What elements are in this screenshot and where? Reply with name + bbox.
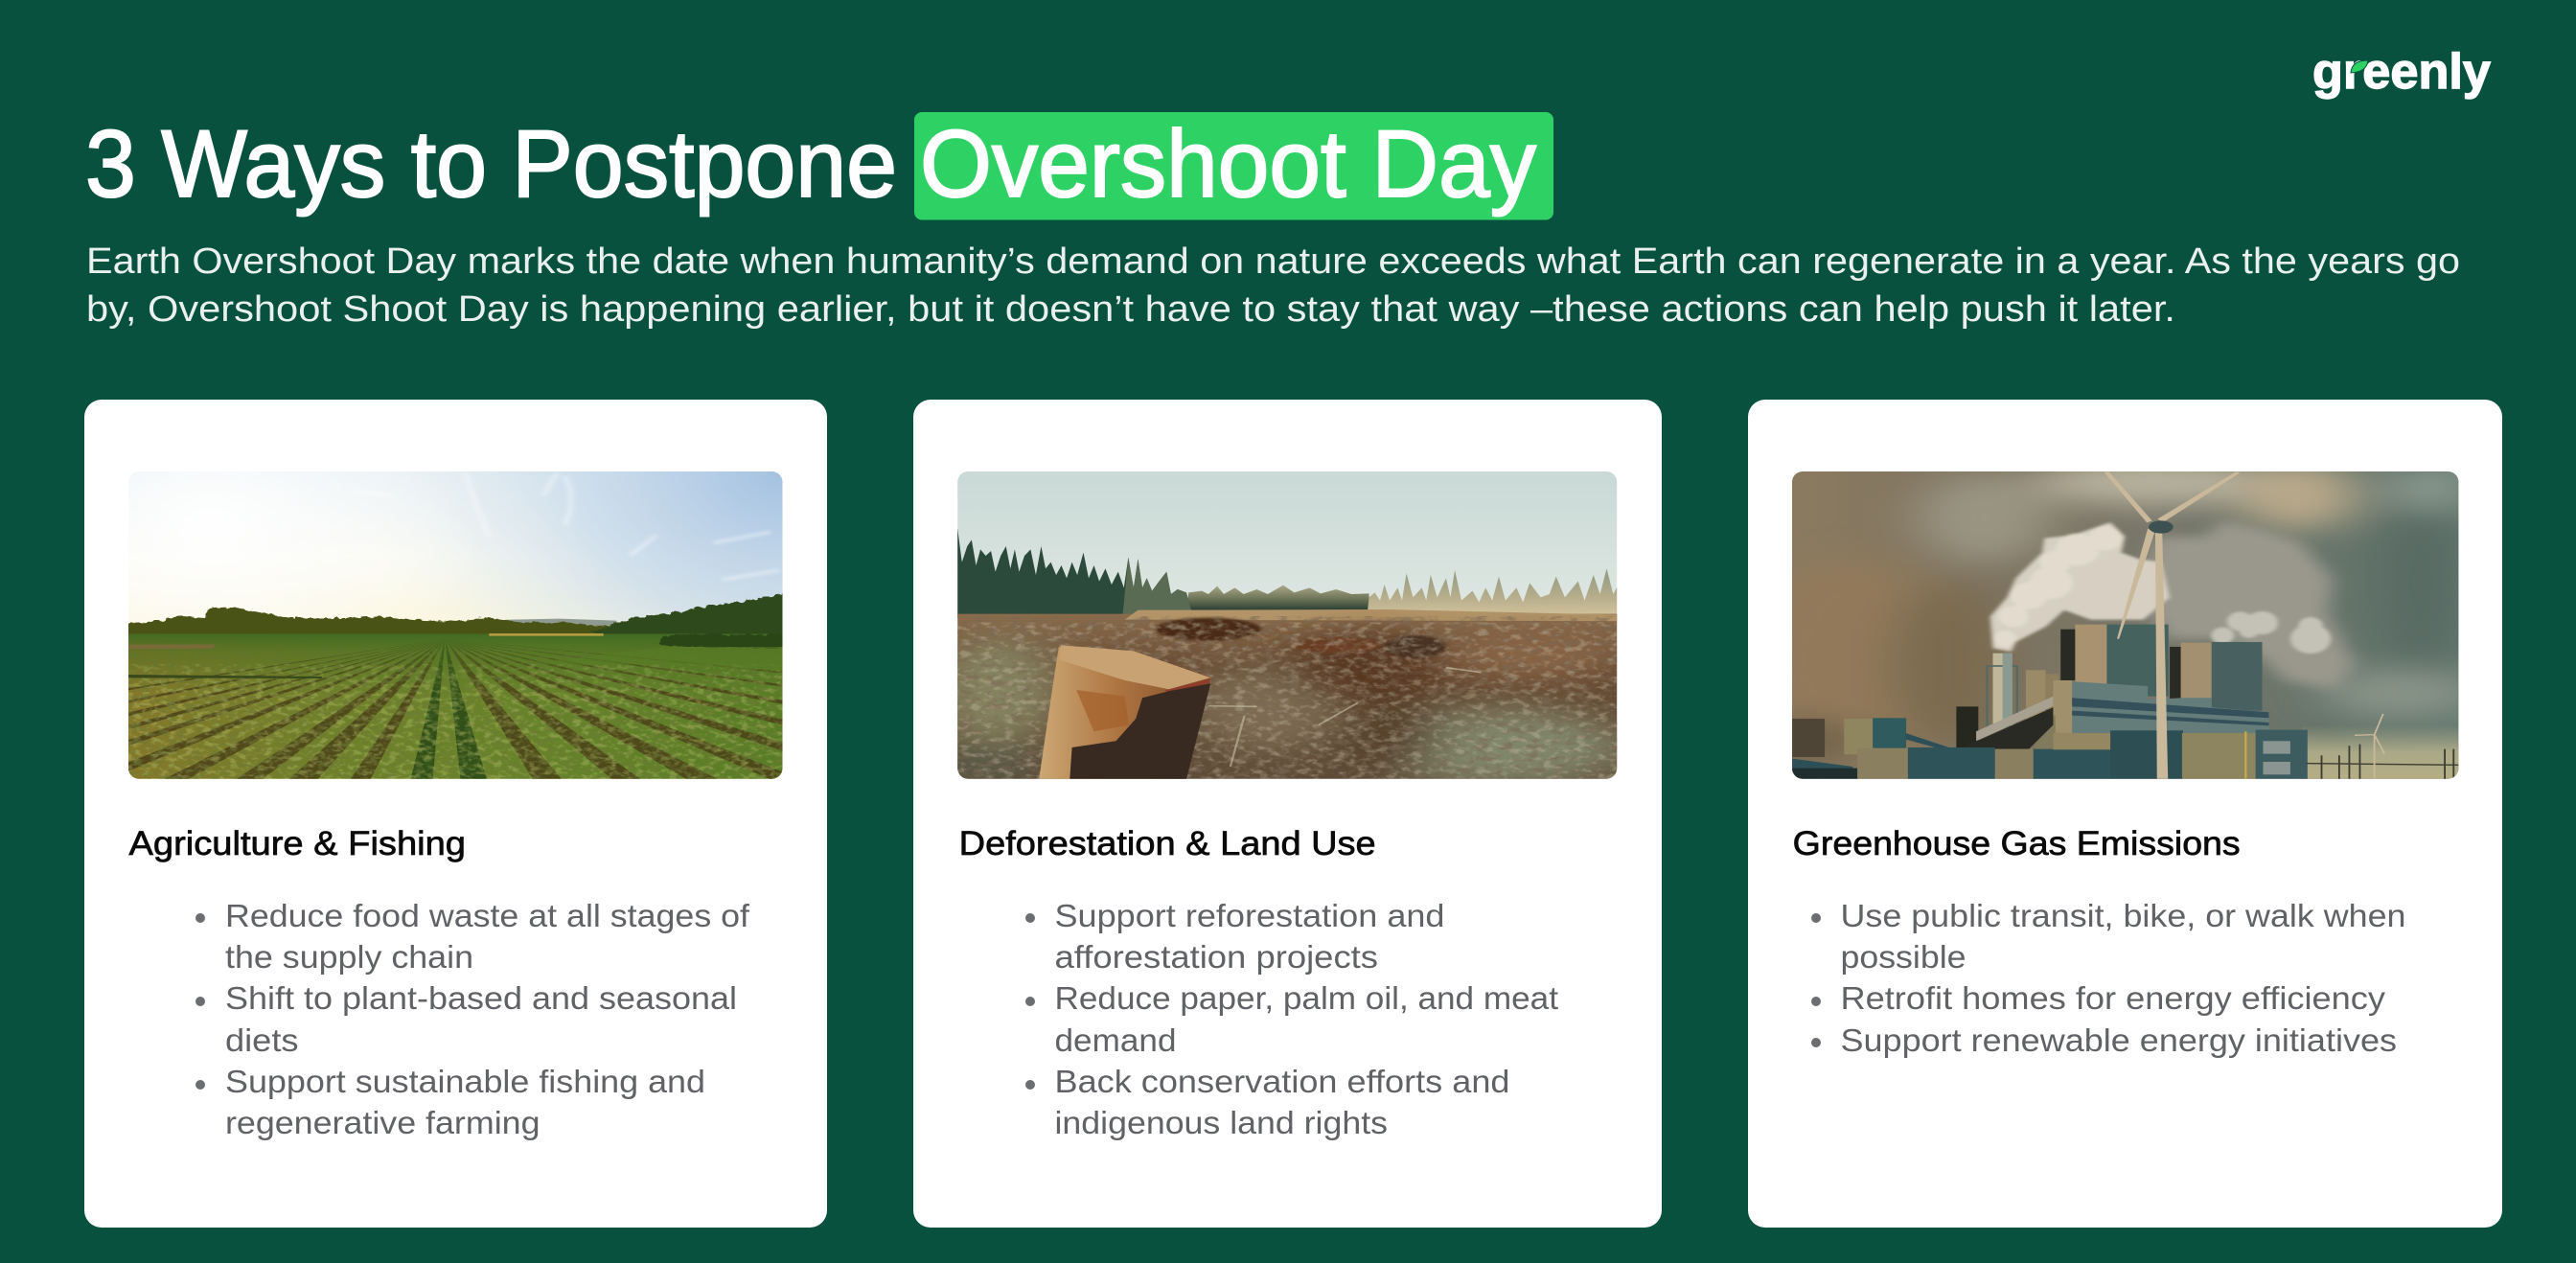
bullet list: Support renewable energy initiatives	[1840, 1023, 2397, 1059]
bullet list: Use public transit, bike, or walk when	[1840, 899, 2405, 934]
bullet list: afforestation projects	[1054, 940, 1378, 976]
panel: agriculture and fishing	[84, 400, 827, 1228]
bullet list: Reduce paper, palm oil, and meat	[1054, 981, 1559, 1017]
title: 3 Ways to Postpone	[85, 110, 897, 217]
title highlight: Overshoot Day: Overshoot Day	[920, 110, 1536, 217]
bullet list	[1025, 899, 1559, 1141]
heading: Deforestation & Land Use	[959, 825, 1376, 862]
panel: deforestation and land use	[913, 400, 1662, 1228]
bullet list	[1811, 899, 2405, 1059]
bullet list	[196, 899, 750, 1141]
logo: greenly: greenly	[2312, 44, 2491, 100]
bullet list: the supply chain	[225, 940, 473, 976]
photo: crop field at sunset	[0, 460, 1898, 783]
bullet list: Reduce food waste at all stages of	[225, 899, 750, 934]
bullet list: Retrofit homes for energy efficiency	[1840, 981, 2385, 1017]
bullet list: Shift to plant-based and seasonal	[225, 981, 737, 1017]
bullet list: demand	[1054, 1023, 1177, 1059]
wind turbine	[2104, 471, 2241, 780]
icon: leaf	[2351, 60, 2368, 73]
gray smoke mass	[2134, 520, 2355, 690]
smoke plume	[1990, 522, 2331, 654]
panel: greenhouse gas emissions	[1743, 400, 2502, 1228]
bullet list: Support sustainable fishing and	[225, 1065, 705, 1100]
intro paragraph	[86, 241, 2460, 330]
bullet list: possible	[1840, 940, 1966, 976]
tree stump	[1039, 645, 1210, 779]
title	[85, 110, 1553, 220]
bullet list: diets	[225, 1023, 299, 1059]
small turbine and pylons	[2306, 714, 2458, 779]
intro paragraph: by, Overshoot Shoot Day is happening earlier, but it doesn’t have to stay that way –these actions can help push it later.	[86, 289, 2175, 330]
bullet list: indigenous land rights	[1054, 1106, 1388, 1141]
bullet list: regenerative farming	[225, 1106, 540, 1141]
heading: Greenhouse Gas Emissions	[1793, 825, 2241, 862]
power plant buildings	[1792, 625, 2308, 781]
photo: power plant with wind turbine	[1792, 471, 2459, 779]
bullet list: Back conservation efforts and	[1054, 1065, 1510, 1100]
intro paragraph: Earth Overshoot Day marks the date when humanity’s demand on nature exceeds what Earth can regenerate in a year. As the years go	[86, 241, 2460, 282]
heading: Agriculture & Fishing	[128, 825, 466, 862]
bullet list: Support reforestation and	[1054, 899, 1445, 934]
photo: clear-cut forest with tree stump	[957, 471, 1618, 779]
